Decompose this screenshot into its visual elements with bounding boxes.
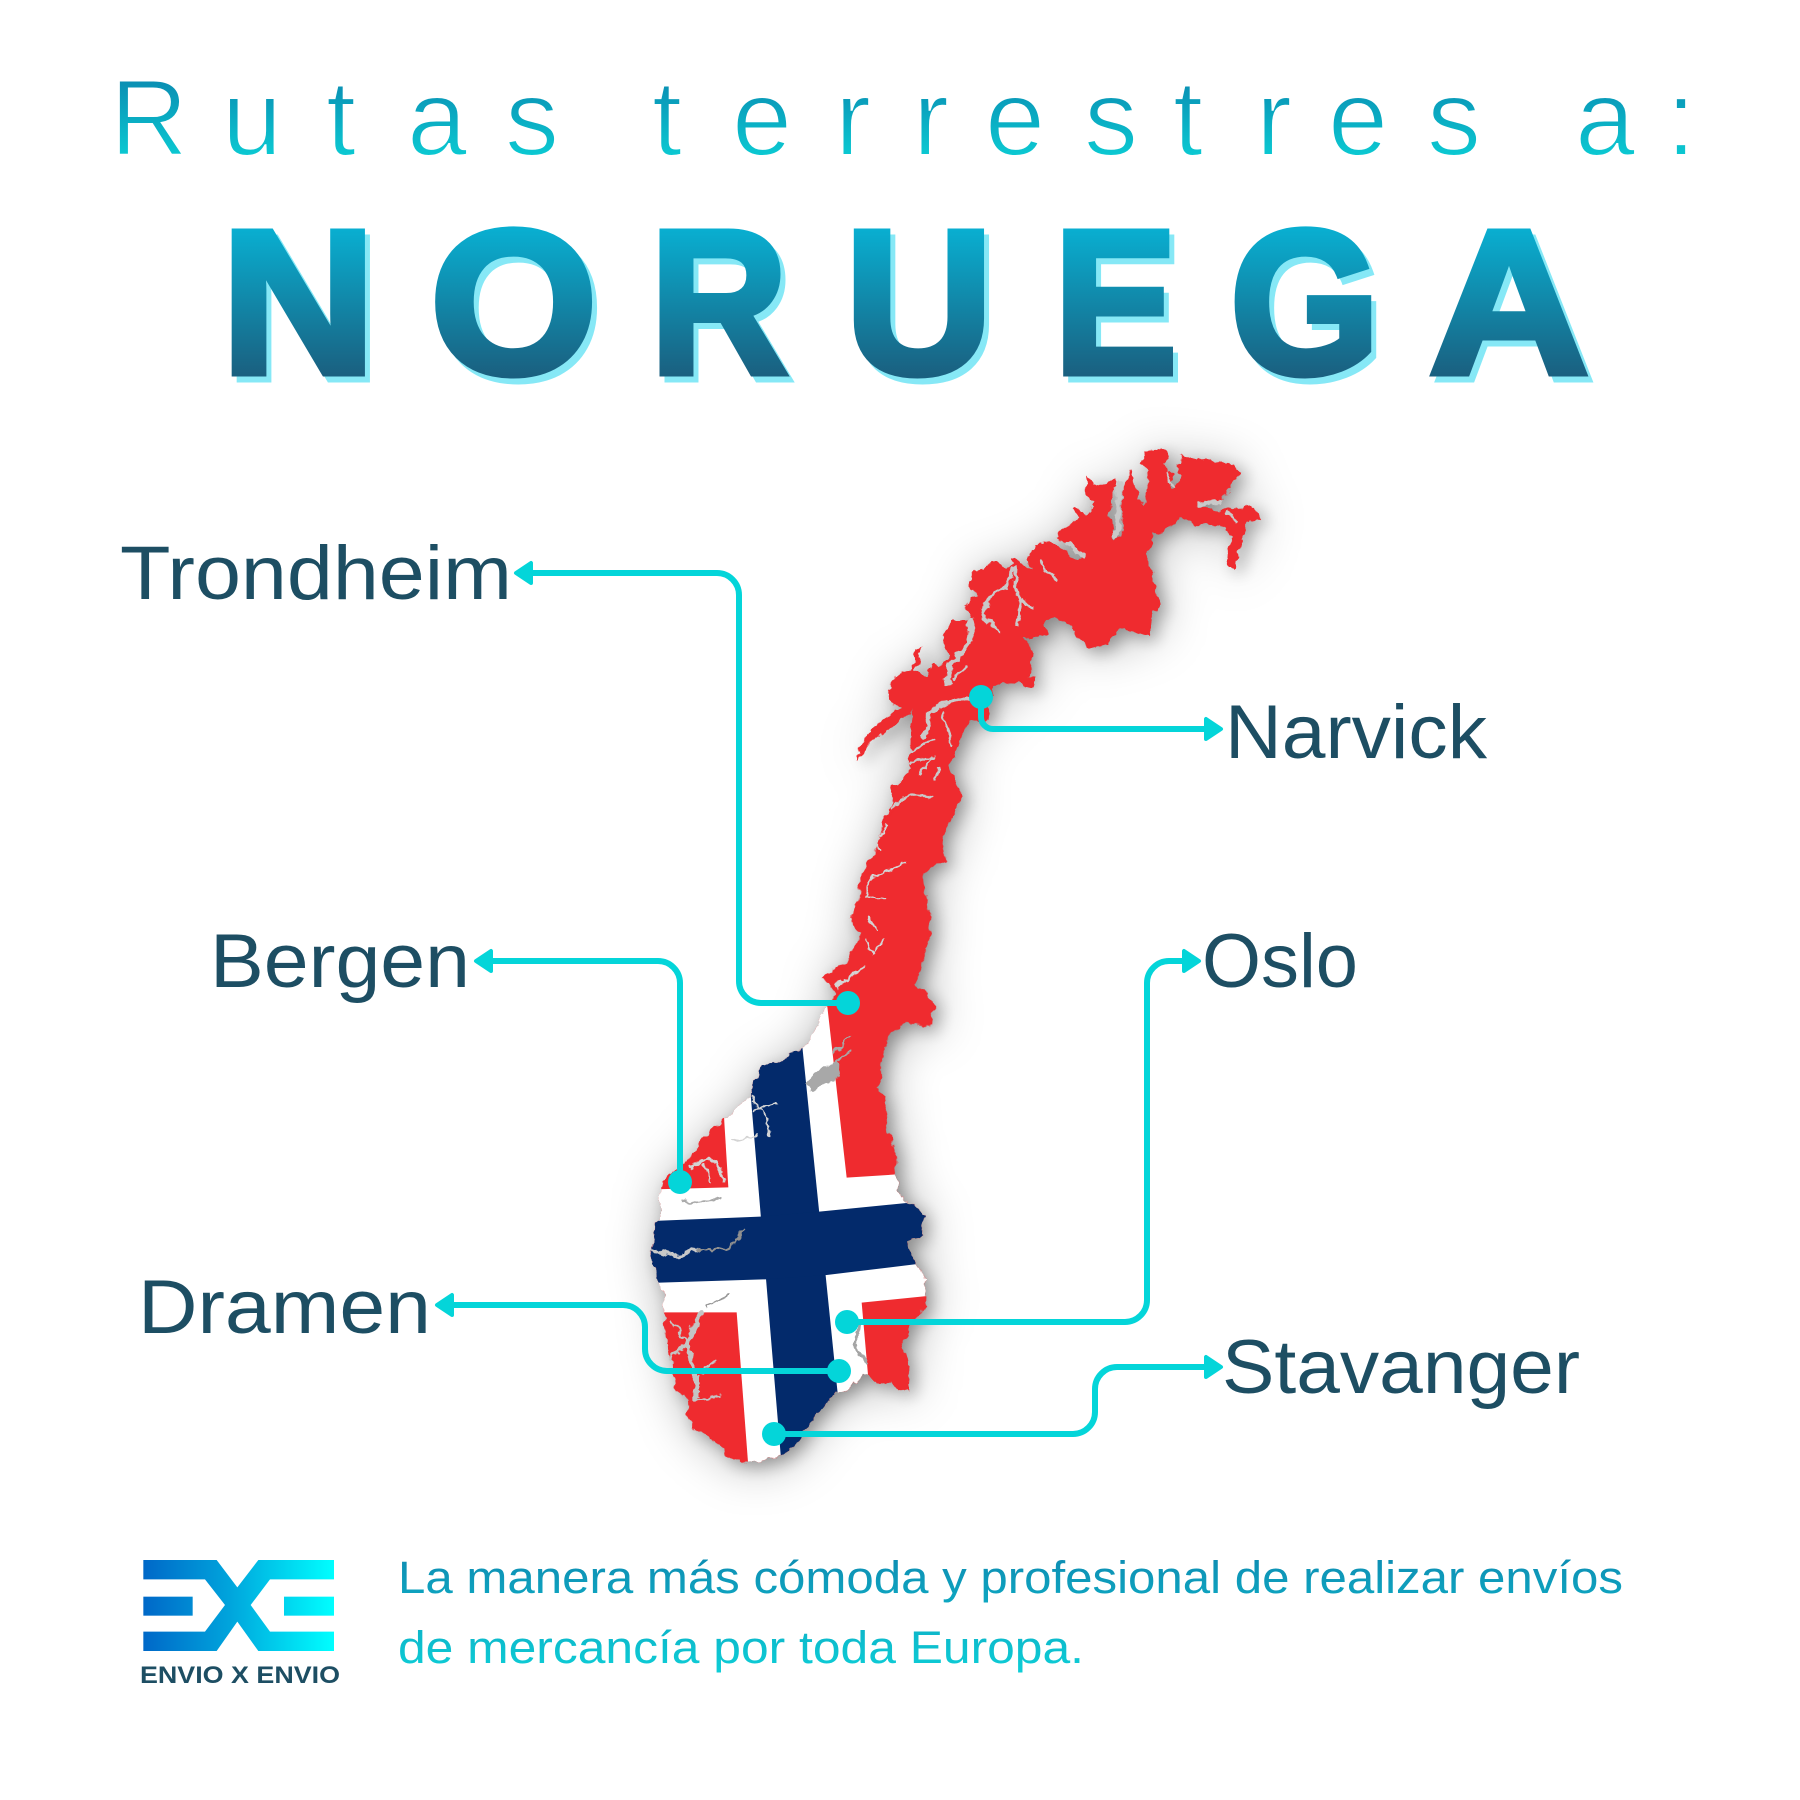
heading: NORUEGA: G [1230, 189, 1380, 417]
footer tagline [398, 1552, 1623, 1673]
footer tagline: La manera más cómoda y profesional de realizar envíos [398, 1552, 1623, 1603]
heading: NORUEGA: E [1054, 188, 1177, 417]
footer tagline: de mercancía por toda Europa. [398, 1622, 1084, 1673]
heading: NORUEGA: O [430, 188, 597, 417]
logo mark [143, 1560, 334, 1651]
northern fjords [893, 473, 1237, 807]
heading: NORUEGA: O [435, 194, 602, 423]
heading: NORUEGA: A [1434, 195, 1594, 423]
label: Stavanger: Stavanger [1222, 1325, 1580, 1410]
heading: NORUEGA: R [655, 194, 793, 422]
flag cross over southern Norway [650, 1006, 927, 1464]
heading: NORUEGA: A [1429, 189, 1589, 417]
heading: NORUEGA: U [845, 188, 993, 417]
heading: NORUEGA: R [650, 188, 788, 416]
logo: Envio X Envio [140, 1560, 340, 1689]
map silhouette, red, with shadow [652, 450, 1261, 1465]
label: Bergen: Bergen [210, 919, 470, 1004]
connector: Dramen [437, 1295, 851, 1383]
label: Narvick: Narvick [1225, 690, 1488, 775]
infographic canvas [120, 82, 1686, 1683]
southern fjords and lakes [653, 827, 907, 1400]
connector: Stavanger [762, 1357, 1221, 1446]
heading: NORUEGA: U [850, 194, 998, 423]
heading: NORUEGA: E [1059, 194, 1182, 423]
city labels [120, 531, 1580, 1410]
map of Norway with flag [620, 450, 1261, 1500]
heading: NORUEGA: G [1235, 195, 1385, 423]
heading: NORUEGA: N [221, 188, 376, 417]
logo wordmark: ENVIO X ENVIO [140, 1662, 340, 1689]
connector: Oslo [835, 951, 1199, 1334]
connector: Narvick [969, 685, 1221, 739]
title: Rutas terrestres a:: Rutas terrestres a: [110, 57, 1696, 178]
heading: NORUEGA: N [226, 194, 381, 423]
connector: Trondheim [516, 563, 860, 1015]
connector: Bergen [476, 951, 692, 1194]
label: Oslo: Oslo [1202, 919, 1358, 1004]
label: Dramen: Dramen [138, 1265, 431, 1350]
label: Trondheim: Trondheim [120, 531, 512, 616]
heading: NORUEGA [221, 188, 1594, 423]
